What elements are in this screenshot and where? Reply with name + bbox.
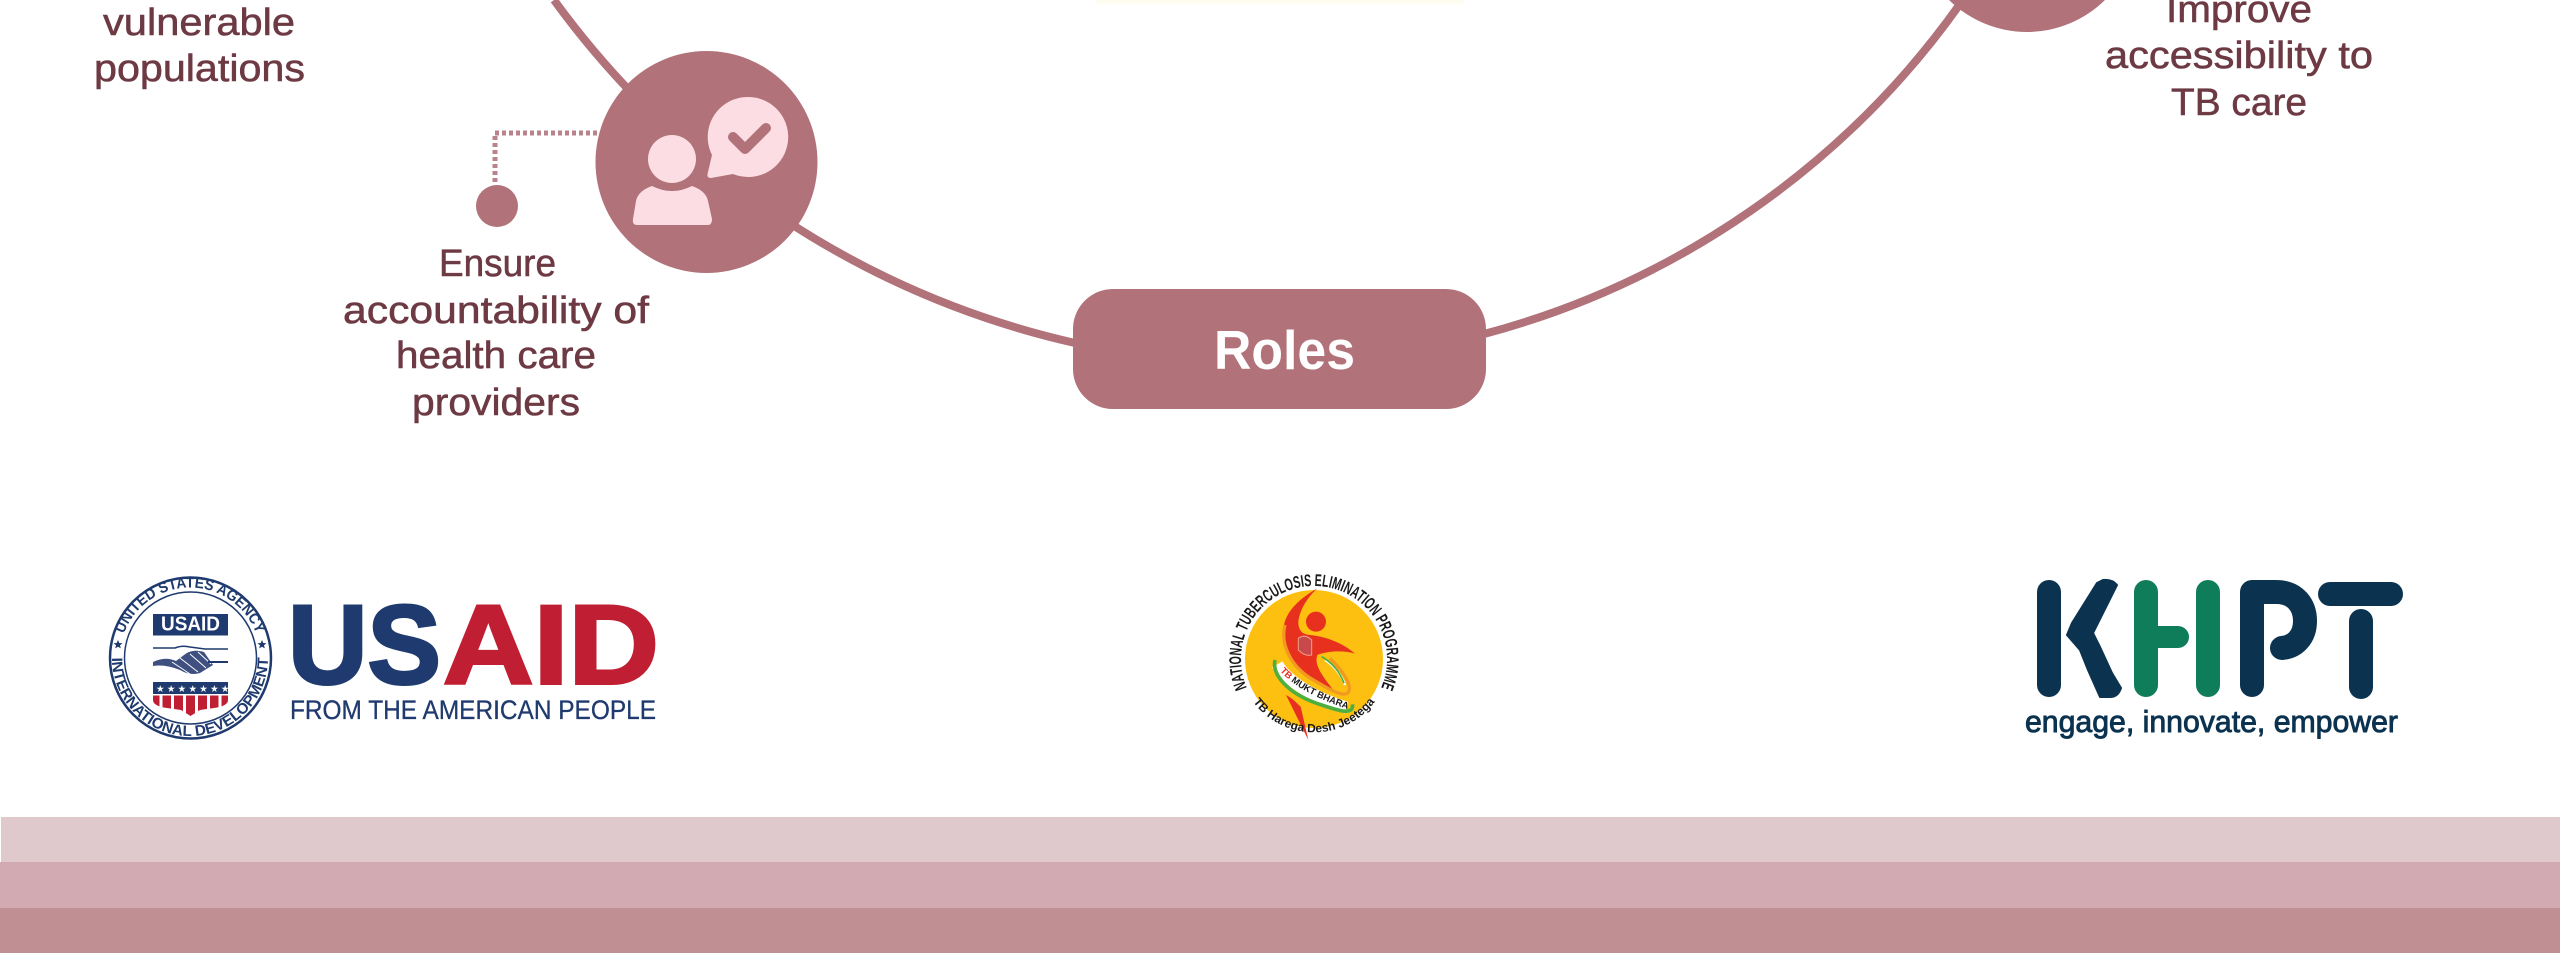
label: ensure accountability: providers xyxy=(412,382,580,424)
USAID wordmark: FROM THE AMERICAN PEOPLE xyxy=(290,695,656,725)
label: ensure accountability: Ensure xyxy=(439,243,556,285)
label: vulnerable populations: populations xyxy=(94,48,305,90)
USAID seal xyxy=(108,576,272,740)
connector dot xyxy=(476,185,518,227)
yellow disc xyxy=(1245,590,1383,728)
label: improve accessibility: accessibility to xyxy=(2105,35,2373,77)
label: vulnerable populations xyxy=(94,2,305,90)
USAID seal: ★★★★★★★ xyxy=(156,684,232,695)
USAID wordmark: US xyxy=(288,582,441,708)
logo: KHPT xyxy=(2025,580,2403,739)
KHPT letter H xyxy=(2134,580,2220,697)
figure: dancing ribbon emblem: TB MUKT BHARAT xyxy=(1281,666,1348,709)
KHPT tagline: engage, innovate, empower xyxy=(2025,704,2398,739)
logo: National TB Elimination Programme xyxy=(1229,574,1399,740)
KHPT letter T xyxy=(2318,582,2403,699)
badge: Roles xyxy=(1073,289,1486,409)
KHPT letter K xyxy=(2037,580,2121,697)
label: improve accessibility xyxy=(2105,0,2373,124)
label: improve accessibility: TB care xyxy=(2171,82,2307,124)
icon: person with speech bubble xyxy=(633,97,788,225)
cycle ring: left arc xyxy=(554,0,1075,343)
label: ensure accountability: accountability of xyxy=(343,290,649,332)
programme name on arc: NATIONAL TUBERCULOSIS ELIMINATION PROGRAMME xyxy=(1229,574,1399,692)
USAID seal: INTERNATIONAL DEVELOPMENT xyxy=(112,657,268,736)
label: ensure accountability: health care xyxy=(396,335,596,377)
node: accessibility circle xyxy=(1916,0,2138,32)
USAID wordmark xyxy=(288,582,659,725)
label: ensure accountability xyxy=(343,243,649,424)
USAID seal: USAID xyxy=(161,614,220,636)
slogan on arc: TB Harega Desh Jeetega xyxy=(1254,696,1375,732)
USAID seal: UNITED STATES AGENCY xyxy=(116,578,264,632)
footer bands xyxy=(0,817,2560,953)
cycle ring: right arc xyxy=(1484,4,1960,334)
logo: USAID xyxy=(108,576,659,740)
figure: dancing ribbon emblem xyxy=(1272,588,1355,740)
node: accountability xyxy=(343,51,818,424)
badge: Roles: Roles xyxy=(1214,319,1355,381)
top edge glow xyxy=(1096,0,1464,6)
label: vulnerable populations: vulnerable xyxy=(103,2,295,44)
KHPT letter P xyxy=(2252,592,2305,685)
dotted connector xyxy=(495,133,597,184)
icon circle xyxy=(596,51,818,273)
USAID wordmark: AID xyxy=(443,582,659,708)
